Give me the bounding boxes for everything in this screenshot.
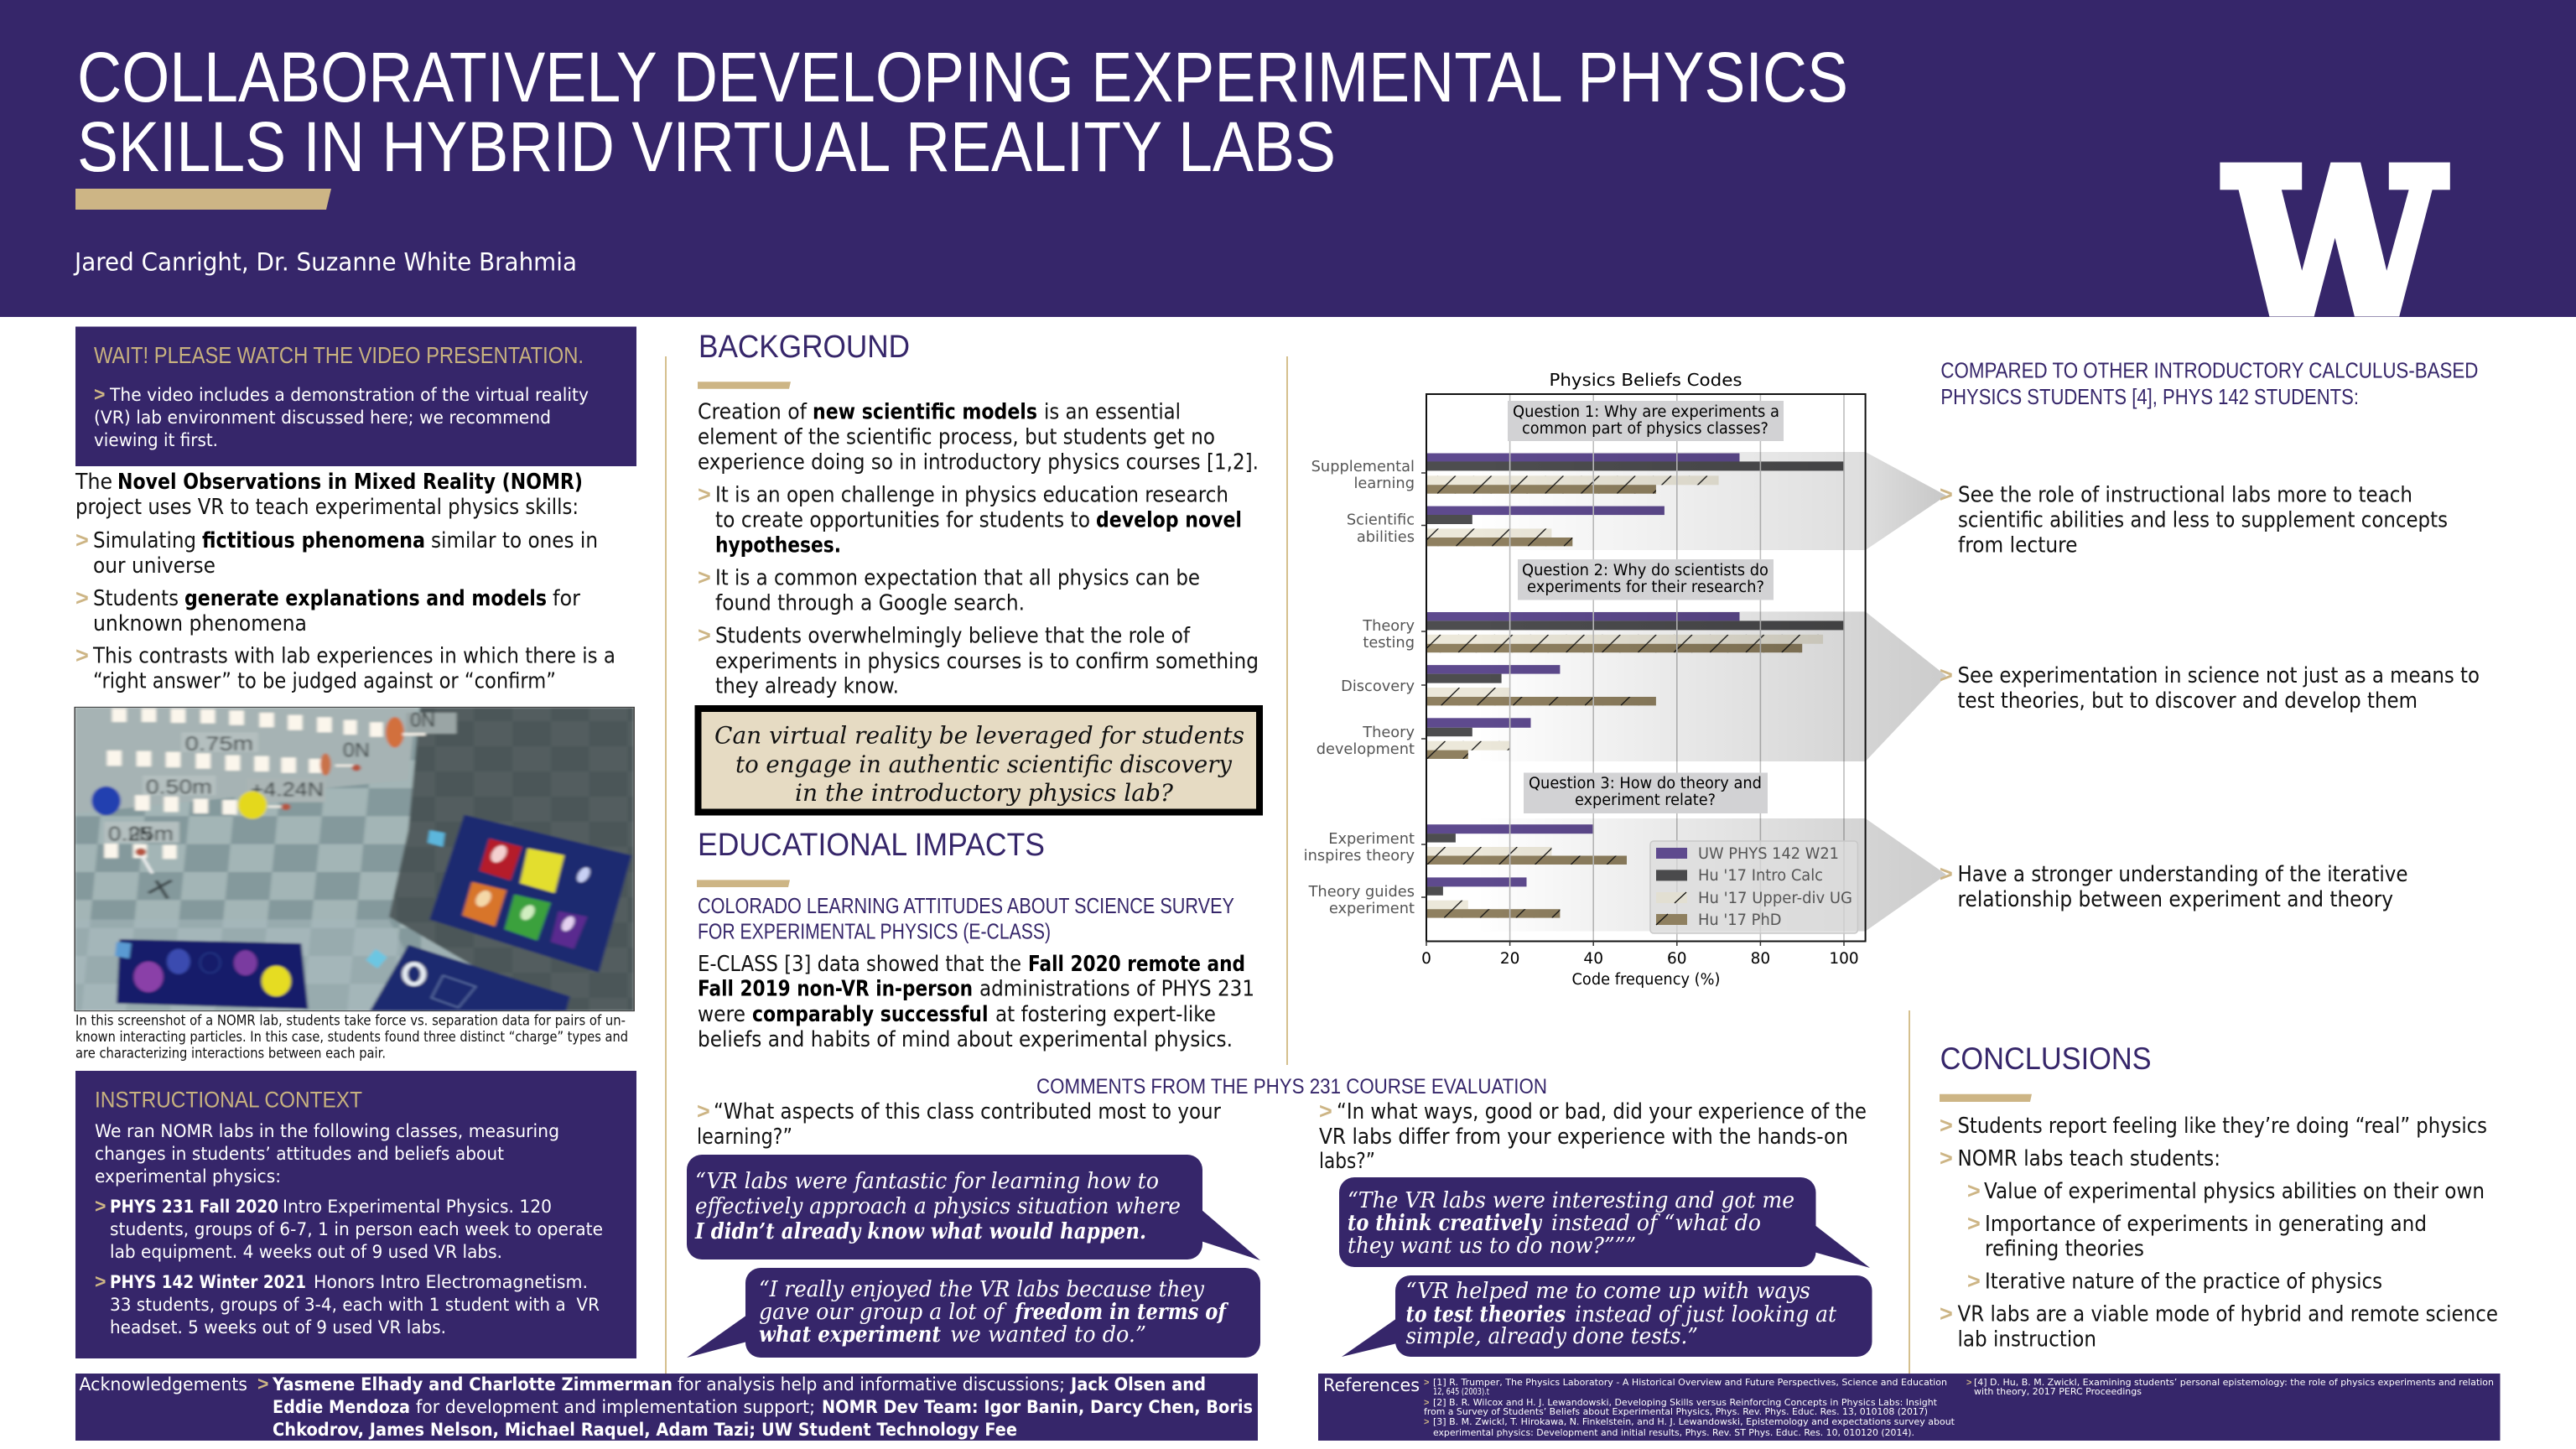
text block: conclusions: Students report feeling like they’re doing “real” physics — [1957, 1114, 2487, 1139]
heading: comparison with other students: COMPARED TO OTHER INTRODUCTORY CALCULUS-BASED — [1940, 358, 2478, 383]
speech bubble: freedom: gave our group a lot of — [759, 1300, 1007, 1325]
context text: PHYS 142 Winter 2021 — [110, 1272, 306, 1293]
text block: background: It is an open challenge in physics education research — [715, 483, 1228, 508]
question two: “In what ways, good or bad, did your experience of the — [1337, 1099, 1867, 1124]
context heading: INSTRUCTIONAL CONTEXT — [95, 1088, 362, 1113]
x-axis tick labels: 100 — [1829, 950, 1859, 968]
image caption: In this screenshot of a NOMR lab, students take force vs. separation data for pairs of un- — [75, 1013, 626, 1030]
y-axis category labels: Discovery — [1341, 678, 1415, 695]
panel: references: > — [1424, 1398, 1429, 1408]
panel: references: > — [1424, 1378, 1429, 1388]
menu panel — [370, 945, 570, 1011]
speech bubble: freedom: what experiment — [759, 1322, 941, 1348]
icon: university W logo — [2220, 163, 2450, 317]
text block: background: > — [698, 622, 711, 647]
context text: Honors Intro Electromagnetism. — [314, 1272, 588, 1293]
callout: research question — [698, 709, 1259, 812]
legend — [1650, 841, 1857, 933]
panel: references — [1318, 1374, 2501, 1441]
x-axis title: Code frequency (%) — [1571, 971, 1721, 989]
text block: NOMR introduction: generate explanations and models — [184, 586, 547, 611]
arrow band: question one to finding — [1426, 452, 1946, 550]
heading accent bar — [697, 880, 790, 887]
y-axis category labels: testing — [1363, 634, 1415, 652]
finding: experimentation in science — [1940, 662, 2480, 714]
question two label: Question 2: Why do scientists do — [1522, 562, 1768, 579]
x-axis tick labels: 20 — [1500, 950, 1519, 968]
text block: E-CLASS results: were — [698, 1002, 745, 1027]
y-axis category labels — [1304, 458, 1415, 917]
text block: NOMR introduction: project uses VR to teach experimental physics skills: — [75, 495, 579, 520]
panel: video notice — [75, 327, 636, 466]
context text: We ran NOMR labs in the following classes, measuring — [95, 1121, 559, 1142]
finding: iterative relationship: Have a stronger understanding of the iterative — [1957, 862, 2408, 887]
context text: changes in students’ attitudes and beliefs about — [95, 1144, 504, 1165]
heading: comparison with other students: PHYSICS STUDENTS [4], PHYS 142 STUDENTS: — [1940, 384, 2359, 409]
bars: supplemental learning — [1426, 453, 1844, 494]
text block: NOMR introduction: our universe — [93, 553, 216, 579]
title accent bar — [75, 189, 331, 210]
heading: educational impacts: EDUCATIONAL IMPACTS — [698, 828, 1045, 863]
context text: Intro Experimental Physics. 120 — [283, 1197, 552, 1218]
bars: scientific abilities — [1426, 506, 1665, 546]
text block: conclusions: > — [1940, 1301, 1953, 1327]
finding: iterative relationship: > — [1940, 861, 1953, 886]
bars: theory guides experiment — [1426, 877, 1560, 918]
y-axis category labels: inspires theory — [1304, 847, 1415, 865]
text block: conclusions: Iterative nature of the practice of physics — [1985, 1270, 2382, 1295]
panel: references: [1] R. Trumper, The Physics Laboratory - A Historical Overview and Future Perspectives, Science and Education — [1433, 1377, 1947, 1388]
title — [77, 38, 1848, 186]
bars: discovery — [1426, 665, 1656, 705]
bar chart: physics beliefs codes — [1304, 370, 1946, 989]
measurement labels: 0N — [343, 740, 370, 761]
notice text: The video includes a demonstration of the virtual reality — [109, 385, 589, 406]
finding: role of labs: from lecture — [1958, 533, 2078, 558]
text block: E-CLASS results: E-CLASS [3] data showed that the — [698, 952, 1021, 977]
text block: NOMR introduction: > — [75, 527, 89, 553]
speech bubble: fantastic for learning: effectively approach a physics situation where — [695, 1194, 1181, 1219]
speech bubble: test theories: to test theories — [1405, 1302, 1566, 1327]
y-axis category labels: Theory guides — [1308, 883, 1415, 901]
text block: background: to create opportunities for students to — [715, 508, 1090, 533]
speech bubble: think creatively — [1339, 1177, 1870, 1268]
finding: iterative relationship: relationship between experiment and theory — [1957, 887, 2393, 912]
panel: acknowledgements: Yasmene Elhady and Charlotte Zimmerman — [272, 1374, 673, 1395]
heading accent bar — [698, 382, 791, 389]
y-axis category labels: experiment — [1329, 900, 1415, 917]
y-axis category labels: Theory — [1362, 617, 1415, 635]
speech bubble: think creatively: to think creatively — [1348, 1211, 1543, 1236]
text block: NOMR introduction: fictitious phenomena — [202, 528, 425, 553]
legend: Hu '17 Upper-div UG — [1698, 890, 1852, 907]
text block: E-CLASS results: Fall 2020 remote and — [1028, 952, 1245, 977]
heading: conclusions: CONCLUSIONS — [1940, 1041, 2152, 1076]
text block: background — [698, 399, 1259, 699]
finding: role of labs: See the role of instructional labs more to teach — [1958, 483, 2412, 508]
question one label: common part of physics classes? — [1522, 420, 1768, 438]
context text: lab equipment. 4 weeks out of 9 used VR labs. — [110, 1242, 502, 1263]
measurement labels: 0.50m — [146, 776, 212, 798]
text block: background: develop novel — [1096, 508, 1242, 533]
x-axis tick labels: 60 — [1667, 950, 1687, 968]
subheading: E-CLASS survey — [698, 893, 1234, 943]
panel: references: > — [1966, 1378, 1971, 1388]
measurement labels — [104, 709, 456, 845]
question one label — [1508, 401, 1784, 441]
text block: background: > — [698, 482, 711, 507]
speech bubble: test theories — [1342, 1275, 1872, 1357]
speech bubble: think creatively: instead of “what do — [1551, 1211, 1761, 1236]
text block: E-CLASS results: administrations of PHYS 231 — [979, 977, 1254, 1002]
image caption: known interacting particles. In this case, students found three distinct “charge” types and — [75, 1029, 628, 1046]
question two label: experiments for their research? — [1527, 579, 1764, 596]
bars: theory testing — [1426, 612, 1844, 652]
image caption: are characterizing interactions between each pair. — [75, 1046, 386, 1062]
text block: E-CLASS results: at fostering expert-like — [995, 1002, 1216, 1027]
text block: conclusions: VR labs are a viable mode of hybrid and remote science — [1957, 1302, 2498, 1327]
context text: PHYS 231 Fall 2020 — [110, 1197, 278, 1218]
text block: NOMR introduction: Novel Observations in Mixed Reality (NOMR) — [117, 470, 583, 495]
question three label: experiment relate? — [1575, 792, 1716, 809]
text block: NOMR introduction: Simulating — [93, 528, 196, 553]
measurement labels: 0.75m — [185, 733, 253, 756]
speech bubble: test theories: simple, already done tests.” — [1405, 1324, 1698, 1349]
context text: > — [95, 1195, 106, 1217]
bars: theory development — [1426, 718, 1531, 759]
speech bubble: fantastic for learning — [687, 1155, 1260, 1260]
text block: NOMR introduction: unknown phenomena — [93, 611, 307, 636]
heading: background: BACKGROUND — [699, 330, 910, 365]
panel: references: experimental physics: Development and initial results, Phys. Rev. ST Phys. Educ. Res. 10, 010120 (2014). — [1433, 1427, 1914, 1438]
context text: > — [95, 1270, 106, 1292]
callout: research question: in the introductory physics lab? — [795, 779, 1174, 807]
authors: Jared Canright, Dr. Suzanne White Brahmia — [73, 248, 577, 277]
notice text: (VR) lab environment discussed here; we recommend — [94, 408, 551, 428]
text block: background: It is a common expectation that all physics can be — [715, 565, 1200, 590]
title: COLLABORATIVELY DEVELOPING EXPERIMENTAL PHYSICS — [77, 38, 1848, 117]
speech bubble: fantastic for learning: I didn’t already know what would happen. — [694, 1219, 1146, 1244]
context text: experimental physics: — [95, 1166, 281, 1187]
text block: NOMR introduction: “right answer” to be judged against or “confirm” — [93, 669, 556, 694]
question two label — [1518, 559, 1774, 600]
question three label — [1524, 773, 1768, 813]
finding: role of labs: > — [1940, 482, 1953, 507]
text block: background: they already know. — [715, 674, 899, 699]
arrow band: question three to finding — [1426, 818, 1946, 931]
legend: Hu '17 Intro Calc — [1698, 867, 1823, 885]
text block: NOMR introduction: for — [553, 586, 580, 611]
legend: UW PHYS 142 W21 — [1698, 845, 1839, 863]
text block: conclusions: > — [1967, 1211, 1981, 1236]
speech bubble: think creatively: they want us to do now?””” — [1348, 1233, 1636, 1259]
question two: VR labs differ from your experience with the hands-on — [1319, 1124, 1848, 1150]
panel: references: [2] B. R. Wilcox and H. J. Lewandowski, Developing Skills versus Reinforcing Concepts in Physics Labs: Insight — [1433, 1397, 1938, 1408]
panel: acknowledgements: for development and implementation support; — [416, 1397, 815, 1418]
text block: conclusions: > — [1940, 1113, 1953, 1138]
heading accent bar — [1940, 1094, 2032, 1102]
measurement labels: 0N — [410, 709, 435, 731]
context text — [95, 1121, 603, 1338]
text block: NOMR introduction: > — [75, 642, 89, 667]
panel: acknowledgements: Chkodrov, James Nelson, Michael Raquel, Adam Tazi; — [273, 1420, 756, 1441]
notice text: > — [94, 383, 105, 405]
control panel right — [429, 815, 631, 973]
heading: comparison with other students — [1940, 358, 2478, 409]
text block: background: > — [698, 564, 711, 589]
title: SKILLS IN HYBRID VIRTUAL REALITY LABS — [77, 107, 1336, 186]
legend: Hu '17 PhD — [1698, 911, 1781, 929]
text block: E-CLASS results: beliefs and habits of mind about experimental physics. — [698, 1027, 1233, 1052]
panel: references: > — [1424, 1417, 1429, 1427]
image: NOMR VR lab screenshot — [75, 707, 634, 1011]
y-axis category labels: development — [1317, 740, 1415, 758]
y-axis category labels: Supplemental — [1311, 458, 1415, 475]
question two: labs?” — [1319, 1149, 1375, 1174]
text block: NOMR introduction — [75, 470, 615, 694]
text block: background: hypotheses. — [715, 532, 841, 558]
question one: > — [697, 1098, 710, 1124]
text block: background: Creation of — [698, 399, 808, 424]
particle tray — [117, 939, 309, 1009]
panel: acknowledgements: Acknowledgements — [79, 1374, 247, 1395]
text block: conclusions: Value of experimental physics abilities on their own — [1984, 1179, 2485, 1204]
y-axis category labels: learning — [1353, 475, 1415, 492]
measurement labels: +4.24N — [251, 779, 324, 801]
question one: “What aspects of this class contributed most to your — [714, 1099, 1221, 1124]
chart title: Physics Beliefs Codes — [1550, 370, 1742, 390]
text block: conclusions: lab instruction — [1957, 1327, 2096, 1353]
speech bubble: freedom: we wanted to do.” — [950, 1322, 1146, 1348]
header band — [0, 0, 2576, 317]
notice heading: WAIT! PLEASE WATCH THE VIDEO PRESENTATION. — [94, 342, 584, 368]
y-axis category labels: Theory — [1362, 724, 1415, 741]
finding: experimentation in science: > — [1940, 662, 1953, 688]
panel: references: [3] B. M. Zwickl, T. Hirokawa, N. Finkelstein, and H. J. Lewandowski, Epistemology and expectations survey about — [1433, 1416, 1955, 1427]
text block: E-CLASS results — [698, 952, 1254, 1052]
panel: acknowledgements: NOMR Dev Team: Igor Banin, Darcy Chen, Boris — [822, 1397, 1253, 1418]
context text: headset. 5 weeks out of 9 used VR labs. — [110, 1317, 446, 1338]
heading: course evaluation comments: COMMENTS FROM THE PHYS 231 COURSE EVALUATION — [1036, 1075, 1547, 1098]
panel: acknowledgements: Jack Olsen and — [1069, 1374, 1206, 1395]
panel: acknowledgements: for analysis help and informative discussions; — [678, 1374, 1065, 1395]
text block: conclusions: refining theories — [1985, 1237, 2144, 1262]
text block: E-CLASS results: comparably successful — [752, 1002, 988, 1027]
panel: acknowledgements: Eddie Mendoza — [273, 1397, 410, 1418]
question one label: Question 1: Why are experiments a — [1513, 403, 1779, 421]
panel: acknowledgements: > — [257, 1373, 268, 1394]
y-axis category labels: abilities — [1357, 528, 1415, 546]
text block: NOMR introduction: > — [75, 585, 89, 610]
finding: role of labs: scientific abilities and less to supplement concepts — [1958, 508, 2448, 533]
text block: NOMR introduction: This contrasts with lab experiences in which there is a — [92, 644, 615, 669]
panel: instructional context — [75, 1071, 636, 1358]
finding: iterative relationship — [1940, 861, 2408, 912]
text block: background: element of the scientific process, but students get no — [698, 424, 1215, 449]
text block: E-CLASS results: Fall 2019 non-VR in-person — [698, 977, 973, 1002]
question one — [697, 1098, 1221, 1150]
notice text — [94, 383, 589, 451]
text block: conclusions: Importance of experiments in generating and — [1985, 1212, 2427, 1237]
panel: acknowledgements — [75, 1373, 1258, 1441]
finding: role of labs — [1940, 482, 2448, 558]
separation markers — [104, 709, 383, 859]
context text: students, groups of 6-7, 1 in person each week to operate — [110, 1219, 603, 1240]
text block: conclusions: NOMR labs teach students: — [1957, 1146, 2220, 1171]
x-axis tick labels: 0 — [1421, 950, 1431, 968]
text block: conclusions: > — [1940, 1145, 1953, 1171]
text block: background: experiments in physics courses is to confirm something — [715, 649, 1259, 674]
speech bubble: freedom: freedom in terms of — [1013, 1300, 1228, 1325]
panel: references: 12, 645 (2003).t — [1433, 1386, 1490, 1397]
text block: background: experience doing so in introductory physics courses [1,2]. — [698, 450, 1259, 475]
callout: research question: to engage in authentic scientific discovery — [735, 750, 1233, 778]
bars: experiment inspires theory — [1426, 824, 1627, 865]
text block: conclusions: > — [1967, 1269, 1981, 1294]
speech bubble: freedom: “I really enjoyed the VR labs because they — [759, 1277, 1204, 1302]
callout: research question: Can virtual reality be leveraged for students — [714, 721, 1244, 749]
image caption — [75, 1013, 628, 1062]
arrow band: question two to finding — [1426, 611, 1946, 761]
subheading: E-CLASS survey: FOR EXPERIMENTAL PHYSICS (E-CLASS) — [698, 918, 1051, 943]
y-axis category labels: Experiment — [1328, 830, 1415, 848]
speech bubble: freedom — [687, 1268, 1260, 1358]
text block: NOMR introduction: similar to ones in — [431, 528, 598, 553]
measurement labels: 0.25m — [108, 823, 174, 845]
speech bubble: fantastic for learning: “VR labs were fantastic for learning how to — [695, 1169, 1159, 1194]
panel: acknowledgements: UW Student Technology Fee — [761, 1420, 1017, 1441]
finding: experimentation in science: See experimentation in science not just as a means to — [1957, 663, 2480, 688]
text block: conclusions — [1940, 1113, 2498, 1353]
text block: background: new scientific models — [813, 399, 1037, 424]
measurement labels: 0N — [129, 823, 153, 845]
text block: NOMR introduction: The — [75, 470, 112, 495]
text block: background: is an essential — [1044, 399, 1181, 424]
text block: background: Students overwhelmingly believe that the role of — [715, 623, 1191, 648]
panel: references: from a Survey of Students’ Beliefs about Experimental Physics, Phys. Rev. Phys. Educ. Res. 13, 010108 (2017) — [1424, 1406, 1928, 1417]
question three label: Question 3: How do theory and — [1529, 775, 1762, 792]
x-axis tick labels: 40 — [1583, 950, 1603, 968]
panel: references: with theory, 2017 PERC Proceedings — [1974, 1386, 2142, 1397]
x-axis tick labels: 80 — [1751, 950, 1770, 968]
y-axis category labels: Scientific — [1347, 512, 1415, 528]
question two: > — [1319, 1098, 1332, 1124]
x-axis tick labels — [1421, 950, 1859, 968]
speech bubble: test theories: instead of just looking at — [1575, 1302, 1837, 1327]
subheading: E-CLASS survey: COLORADO LEARNING ATTITUDES ABOUT SCIENCE SURVEY — [698, 893, 1234, 918]
text block: background: found through a Google search. — [715, 590, 1025, 615]
particles — [91, 787, 121, 815]
speech bubble: think creatively: “The VR labs were interesting and got me — [1348, 1188, 1794, 1213]
panel: references: References — [1323, 1375, 1420, 1396]
context text: 33 students, groups of 3-4, each with 1 student with a VR — [110, 1295, 600, 1316]
panel: references: [4] D. Hu, B. M. Zwickl, Examining students’ personal epistemology: the role of physics experiments and relation — [1974, 1377, 2494, 1388]
speech bubble: test theories: “VR helped me to come up with ways — [1405, 1279, 1810, 1304]
question two — [1319, 1098, 1867, 1174]
finding: experimentation in science: test theories, but to discover and develop them — [1957, 688, 2418, 714]
notice text: viewing it first. — [94, 430, 218, 451]
text block: conclusions: > — [1967, 1178, 1981, 1203]
question one: learning?” — [697, 1124, 792, 1150]
text block: NOMR introduction: Students — [93, 586, 179, 611]
